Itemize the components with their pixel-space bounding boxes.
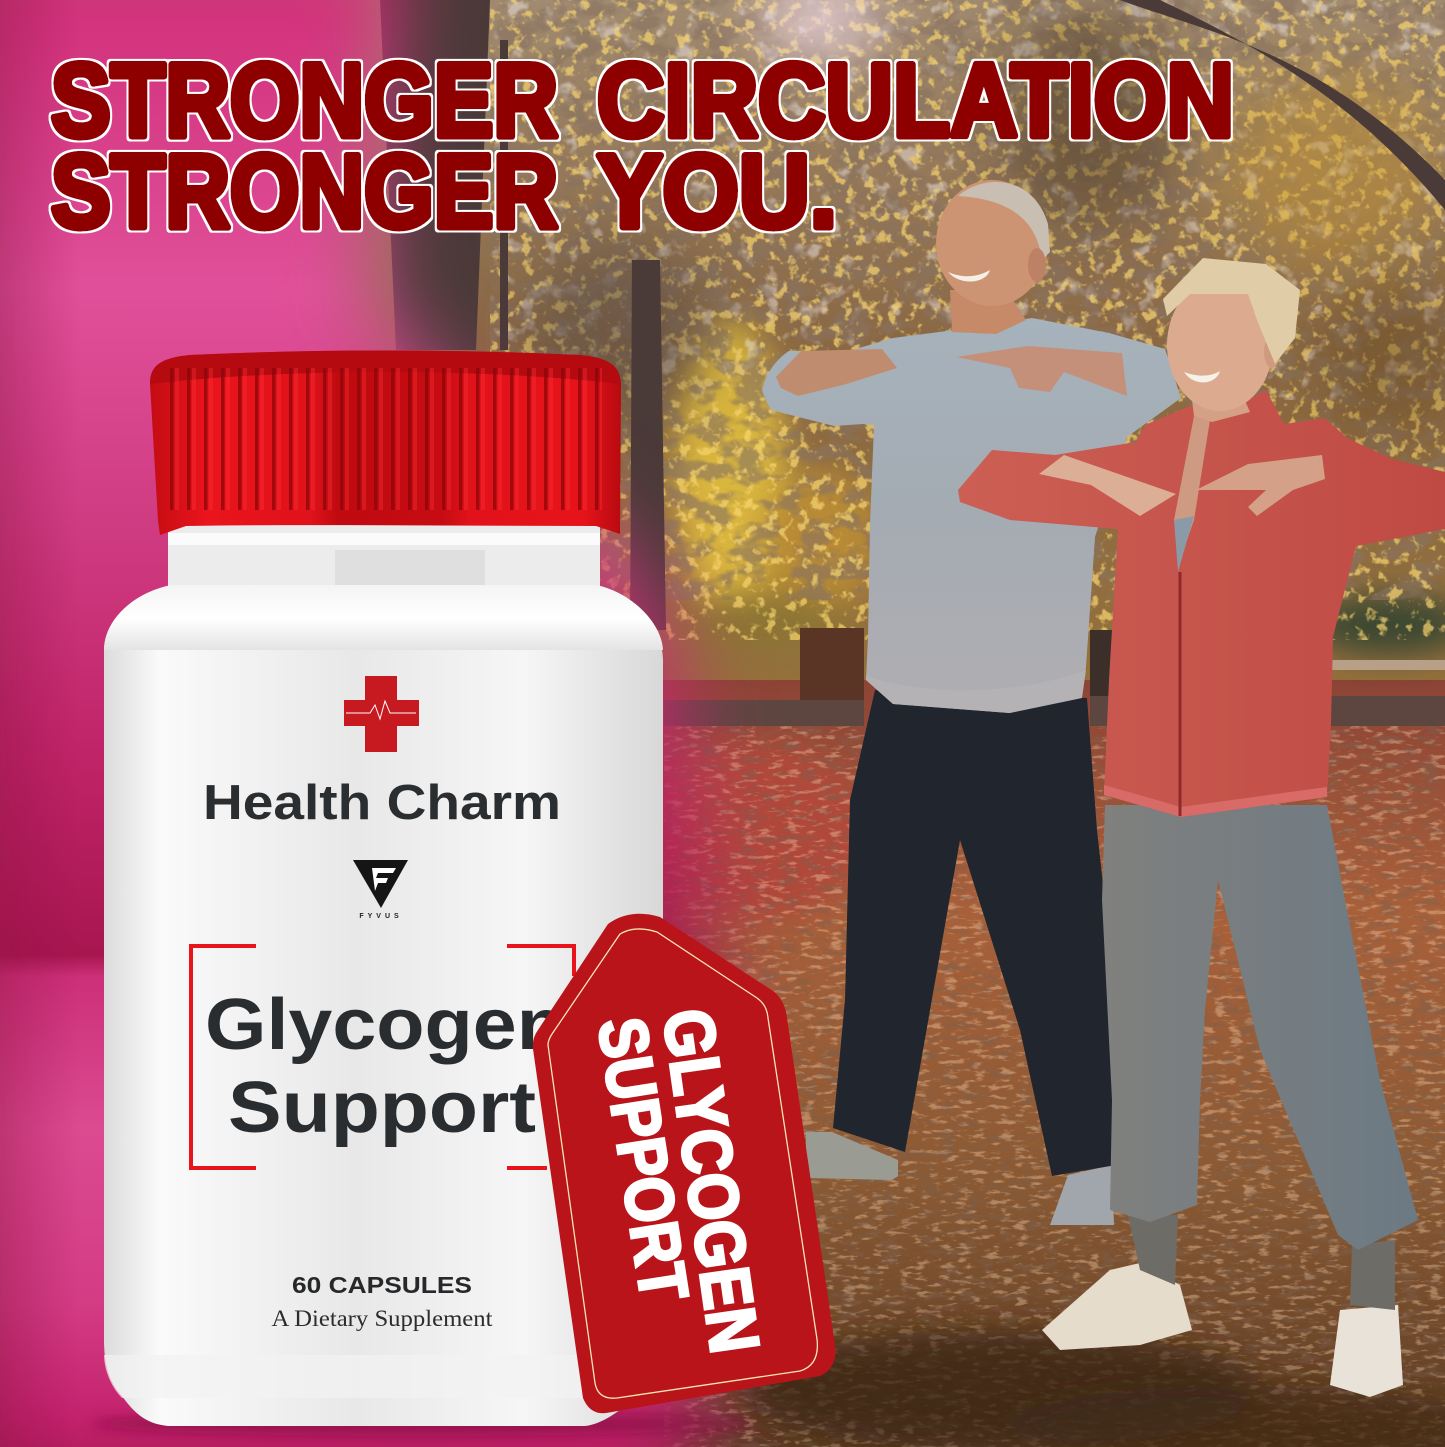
woman head: [1167, 279, 1273, 411]
woman chest and shirt: [1174, 416, 1210, 560]
park ledge: [664, 696, 1445, 726]
woman shoes: [1042, 1263, 1192, 1350]
tag text: support: SUPPORT: [583, 1013, 702, 1306]
woman jacket: [958, 390, 1445, 817]
headline: STRONGER: [51, 134, 558, 250]
product name: Glycogen: [205, 985, 565, 1065]
capsule count: 60 CAPSULES: [292, 1272, 472, 1298]
man trousers: [833, 690, 1122, 1176]
headline: YOU.: [597, 134, 837, 250]
tag text: glycogen: GLYCOGEN: [648, 1004, 774, 1358]
woman left hand: [1039, 455, 1176, 516]
sky patches: [490, 0, 1445, 400]
woman right hand: [1196, 455, 1325, 516]
man right hand: [956, 346, 1127, 396]
icon: Fyvus logo: [353, 860, 408, 920]
yellow leaves: [490, 0, 1445, 640]
pink gradient panel: [0, 0, 768, 1447]
ground shadows: [740, 1330, 1445, 1447]
man shoes: [806, 1132, 898, 1180]
foliage tone patches: [530, 0, 1445, 440]
icon: Fyvus logo: FYVUS: [359, 913, 403, 920]
person: woman exercising: [958, 258, 1445, 1397]
dark branches: [490, 0, 1445, 600]
woman neck: [1192, 394, 1250, 422]
man head: [936, 180, 1048, 306]
headline: CIRCULATION: [597, 43, 1234, 159]
product bottle: [104, 350, 663, 1426]
bottle body: [104, 585, 663, 1426]
woman ankles: [1128, 1215, 1178, 1285]
product name: Support: [228, 1068, 536, 1148]
person: man exercising: [762, 180, 1181, 1225]
bottle cap: [150, 350, 621, 535]
man sweater: [762, 318, 1181, 713]
ground leaves: [664, 726, 1445, 1447]
headline: STRONGER: [51, 43, 558, 159]
icon: red medical cross: [344, 676, 419, 752]
brand name: Health Charm: [203, 776, 561, 830]
product name: [205, 985, 565, 1148]
label brackets: [191, 946, 574, 1168]
man neck: [950, 290, 1026, 334]
supplement statement: A Dietary Supplement: [272, 1306, 493, 1331]
headline: [51, 43, 1234, 250]
bottle neck: [168, 520, 600, 590]
tree trunks: [380, 0, 1445, 630]
tag: glycogen support: [533, 914, 835, 1413]
man left hand: [776, 349, 897, 396]
woman trousers: [1102, 805, 1418, 1250]
